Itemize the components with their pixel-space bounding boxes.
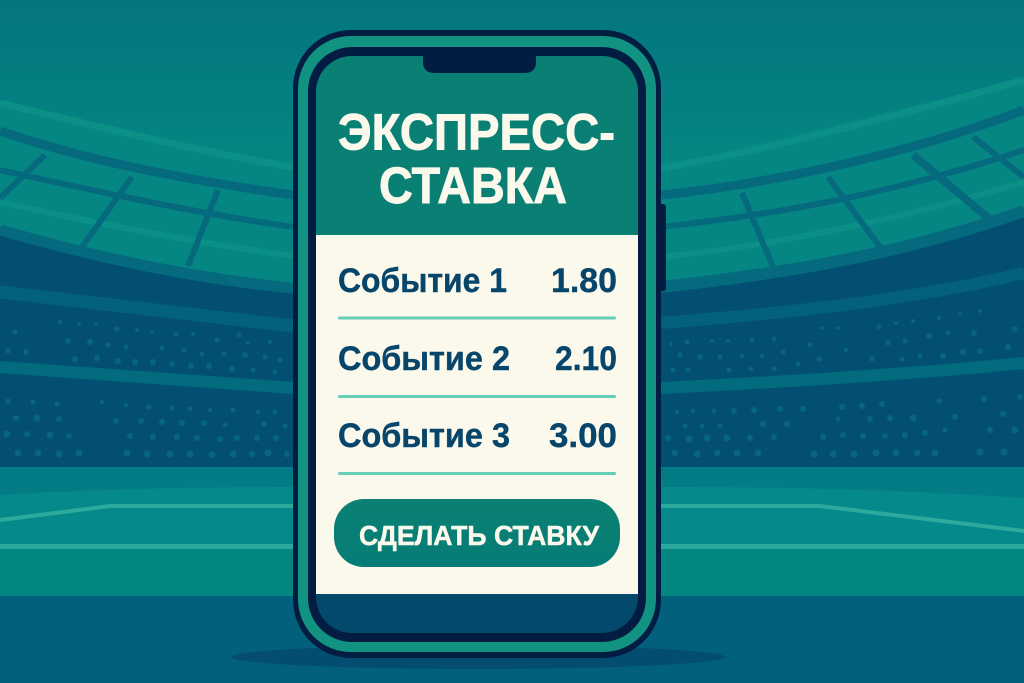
pitch line near [0,544,1024,549]
background: stadium stands [0,212,1024,467]
title: ЭКСПРЕСС- [338,104,615,160]
divider [338,395,616,398]
phone bezel [308,47,646,642]
row: event 3: Событие 3 [338,417,510,455]
row: event 1 [338,262,617,300]
row: event 2 [338,340,617,378]
panel: header [316,56,638,235]
row: event 2: 2.10 [555,340,617,378]
phone green frame [298,36,656,652]
divider [338,472,616,475]
row: event 1: Событие 1 [338,262,507,300]
crowd dots [4,309,1023,458]
notch [423,52,536,73]
stadium roof right [661,80,1024,290]
row: event 3 [338,417,617,455]
roof beams [661,110,1024,287]
phone screen [316,56,638,633]
stand band lower right [661,363,1024,388]
stadium roof left [0,103,293,290]
row: event 3: 3.00 [549,417,617,455]
phone shadow [231,645,725,669]
button: place bet [334,499,620,567]
pitch line far [0,506,1024,531]
pitch [0,467,1024,596]
row: event 1: 1.80 [551,262,617,300]
background: sky [0,0,1024,300]
roof highlight lines [0,103,293,167]
phone [293,30,666,658]
roof highlight lines [661,80,1024,168]
stand band lower left [0,367,293,388]
divider [338,316,616,320]
roof beams [0,131,293,288]
stand band upper left [0,292,293,326]
ground [0,596,1024,683]
panel: bet list [316,235,638,594]
title [338,104,615,214]
stand band upper right [661,273,1024,323]
pitch far strip [0,467,1024,498]
button label: СДЕЛАТЬ СТАВКУ [359,520,600,551]
phone body outer [293,30,661,658]
side button [656,204,666,291]
screen base [316,56,638,633]
pitch near strip [0,549,1024,596]
row: event 2: Событие 2 [338,340,510,378]
title: СТАВКА [379,157,567,214]
